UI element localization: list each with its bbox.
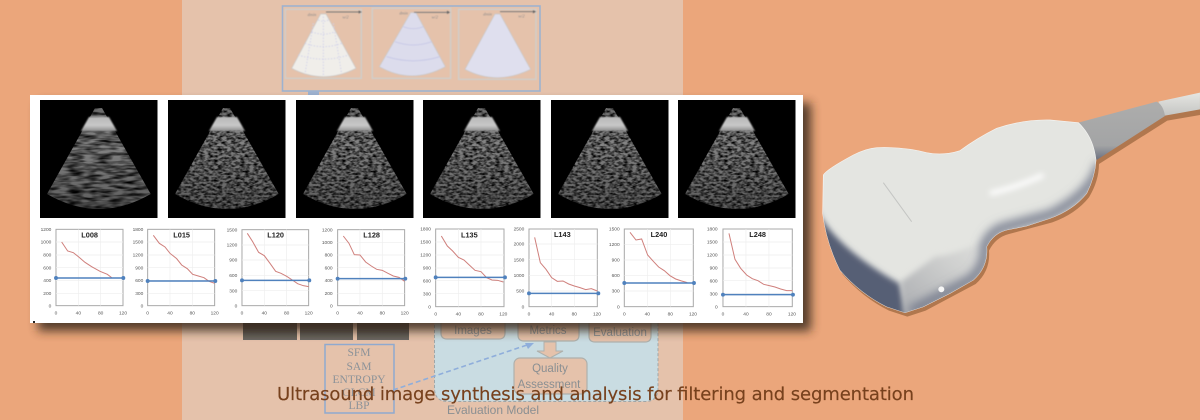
chart L015: 0 — [141, 303, 144, 309]
chart L128: 0 — [330, 303, 333, 309]
chart L143: 0 — [528, 311, 531, 317]
chart L240: 0 — [617, 304, 620, 310]
arrow: metrics to quality — [537, 342, 563, 358]
chart L008: 400 — [43, 278, 52, 284]
chart L128: 600 — [325, 265, 333, 271]
chart L008: 40 — [76, 311, 81, 317]
top diagram: synthesis grids: dmin — [399, 11, 408, 16]
chart L120: L120 — [267, 231, 284, 240]
chart L120: 0 — [235, 303, 238, 309]
chart L008: L008 — [81, 231, 98, 240]
chart L128: 80 — [380, 311, 385, 317]
probe neck — [1078, 102, 1165, 160]
chart L248: 1500 — [707, 240, 718, 246]
chart L135: 300 — [423, 291, 431, 297]
label: evaluation model: Evaluation Model — [447, 403, 539, 417]
chart L135: 80 — [478, 311, 484, 317]
results card — [30, 95, 803, 323]
feature list box: SFM — [347, 347, 371, 359]
chart L240: L240 — [651, 230, 667, 239]
chart L008 — [41, 227, 127, 317]
chart L120: 1200 — [227, 243, 238, 249]
chart L128: 0 — [336, 311, 339, 317]
chart L248: 600 — [710, 278, 718, 284]
chart L015: 900 — [135, 265, 144, 271]
chart L135: 900 — [423, 266, 431, 272]
chart L015: 120 — [211, 311, 219, 317]
chart L143: 40 — [549, 311, 555, 317]
box: evaluation — [589, 320, 651, 342]
top diagram: synthesis grids: w/2 — [432, 15, 439, 20]
chart L135: 120 — [499, 311, 508, 317]
background band — [182, 0, 683, 420]
chart L240: 1500 — [609, 227, 620, 233]
top diagram: synthesis grids: dmin — [483, 11, 492, 16]
ultrasound image 6 — [678, 100, 796, 218]
chart L143: 500 — [516, 289, 525, 295]
chart L008: 1000 — [41, 240, 52, 246]
chart L248 — [707, 227, 796, 317]
chart L015: L015 — [173, 231, 190, 240]
chart L135: 1800 — [420, 227, 431, 233]
chart L143: 1500 — [514, 257, 525, 263]
feature list box: GLCM — [342, 387, 376, 399]
probe side shading — [823, 212, 908, 312]
chart L128: 400 — [325, 278, 333, 284]
feature list box: ENTROPY — [332, 374, 386, 386]
chart L248: 1800 — [707, 227, 718, 233]
charts left group — [41, 227, 409, 317]
chart L143 — [514, 227, 601, 317]
chart L240: 900 — [612, 258, 620, 264]
chart L240: 120 — [689, 311, 697, 317]
chart L120: 120 — [305, 311, 313, 317]
chart L143: L143 — [554, 230, 571, 239]
chart L143: 2000 — [514, 242, 525, 248]
chart L128 — [322, 227, 409, 317]
chart L135: 1500 — [420, 240, 431, 246]
box: quality assessment: Quality — [532, 363, 568, 375]
chart L008: 800 — [43, 253, 52, 259]
probe highlight — [990, 175, 1043, 193]
chart L008: 600 — [43, 265, 52, 271]
probe shadow — [825, 97, 1200, 317]
chart L248: 1200 — [707, 253, 718, 259]
chart L135: 1200 — [420, 253, 431, 259]
feature list box: LBP — [348, 400, 370, 412]
chart L143: 2500 — [514, 227, 525, 233]
chart L128: 120 — [401, 311, 409, 317]
chart L143: 120 — [593, 311, 601, 317]
ultrasound image 3 — [296, 100, 414, 218]
chart L248: 80 — [766, 311, 772, 317]
feature list box: SAM — [347, 361, 371, 373]
chart L248: 120 — [788, 311, 796, 317]
chart L240: 1200 — [609, 242, 620, 248]
chart L143: 1000 — [514, 273, 525, 279]
chart L240: 600 — [612, 273, 620, 279]
top diagram: synthesis grids: w/2 — [518, 13, 525, 18]
feature list box — [325, 344, 394, 413]
top diagram: synthesis grids: dmin — [308, 12, 316, 17]
chart L120: 80 — [284, 311, 290, 317]
chart L135: 600 — [423, 278, 431, 284]
chart L248: 0 — [715, 304, 718, 310]
caption: Ultrasound image synthesis and analysis for filtering and segmentation — [277, 384, 914, 405]
chart L120: 1500 — [227, 227, 238, 233]
chart L008: 1200 — [41, 227, 52, 233]
chart L135 — [420, 227, 508, 317]
probe front face — [898, 246, 987, 312]
chart L015: 600 — [135, 278, 144, 284]
chart L015: 1800 — [133, 227, 144, 233]
chart L240: 80 — [668, 311, 673, 317]
probe LED dot — [938, 286, 944, 292]
chart L248: 40 — [743, 311, 749, 317]
chart L143: 80 — [572, 311, 577, 317]
chart L120 — [227, 227, 313, 317]
card shadow — [38, 103, 811, 331]
top diagram: synthesis grids — [282, 6, 540, 96]
ultrasound image 2 — [168, 100, 286, 218]
charts right group — [420, 227, 796, 317]
chart L240: 300 — [612, 289, 620, 295]
ultrasound image row — [40, 100, 796, 218]
ultrasound image 1 — [40, 100, 158, 218]
chart L120: 40 — [262, 311, 267, 317]
chart L135: 0 — [428, 304, 431, 310]
chart L008: 200 — [43, 291, 52, 297]
chart L128: 800 — [325, 253, 333, 259]
chart L128: 40 — [357, 311, 363, 317]
chart L015: 0 — [146, 311, 149, 317]
chart L120: 900 — [229, 258, 238, 264]
ultrasound image 4 — [423, 100, 540, 218]
chart L015: 80 — [190, 311, 195, 317]
chart L128: L128 — [363, 231, 380, 240]
probe cable — [1158, 93, 1200, 116]
box: quality assessment: Assessment — [518, 379, 581, 391]
probe lower edge shading — [910, 163, 1100, 312]
chart L008: 80 — [98, 311, 104, 317]
chart L248: 0 — [722, 311, 725, 317]
chart L128: 200 — [325, 291, 333, 297]
chart L248: 900 — [710, 266, 718, 272]
chart L015: 300 — [135, 291, 144, 297]
box: quality assessment — [514, 358, 587, 394]
chart L120: 0 — [241, 311, 244, 317]
evaluation model panel — [434, 320, 658, 417]
chart L015: 40 — [167, 311, 173, 317]
ultrasound image 5 — [551, 100, 668, 218]
box: evaluation: Evaluation — [593, 327, 647, 339]
probe body — [810, 120, 1100, 323]
chart L120: 600 — [229, 273, 238, 279]
chart L008: 0 — [55, 311, 58, 317]
box: metrics — [518, 320, 579, 341]
chart L135: 0 — [434, 311, 437, 317]
chart L248: 300 — [710, 291, 718, 297]
lower diagram: thumbnails — [243, 320, 409, 340]
box: metrics: Metrics — [529, 325, 567, 337]
chart L135: 40 — [456, 311, 461, 317]
chart L128: 1200 — [322, 227, 333, 233]
chart L008: 0 — [49, 303, 52, 309]
chart L240: 0 — [623, 311, 626, 317]
chart L015 — [133, 227, 219, 317]
chart L015: 1200 — [133, 253, 144, 259]
box: images: Images — [454, 325, 492, 337]
ultrasound probe illustration — [810, 93, 1200, 323]
probe marker groove — [883, 183, 912, 222]
chart L143: 0 — [522, 304, 525, 310]
chart L240: 40 — [645, 311, 650, 317]
dashed arrow: features to metrics — [393, 343, 534, 390]
chart L120: 300 — [229, 288, 238, 294]
chart L008: 120 — [119, 311, 127, 317]
chart L015: 1500 — [133, 240, 144, 246]
chart L128: 1000 — [322, 240, 333, 246]
chart L135: L135 — [461, 231, 478, 240]
top diagram: synthesis grids: w/2 — [342, 15, 349, 20]
chart L240 — [609, 227, 697, 317]
box: images — [441, 320, 505, 339]
chart L248: L248 — [749, 230, 766, 239]
